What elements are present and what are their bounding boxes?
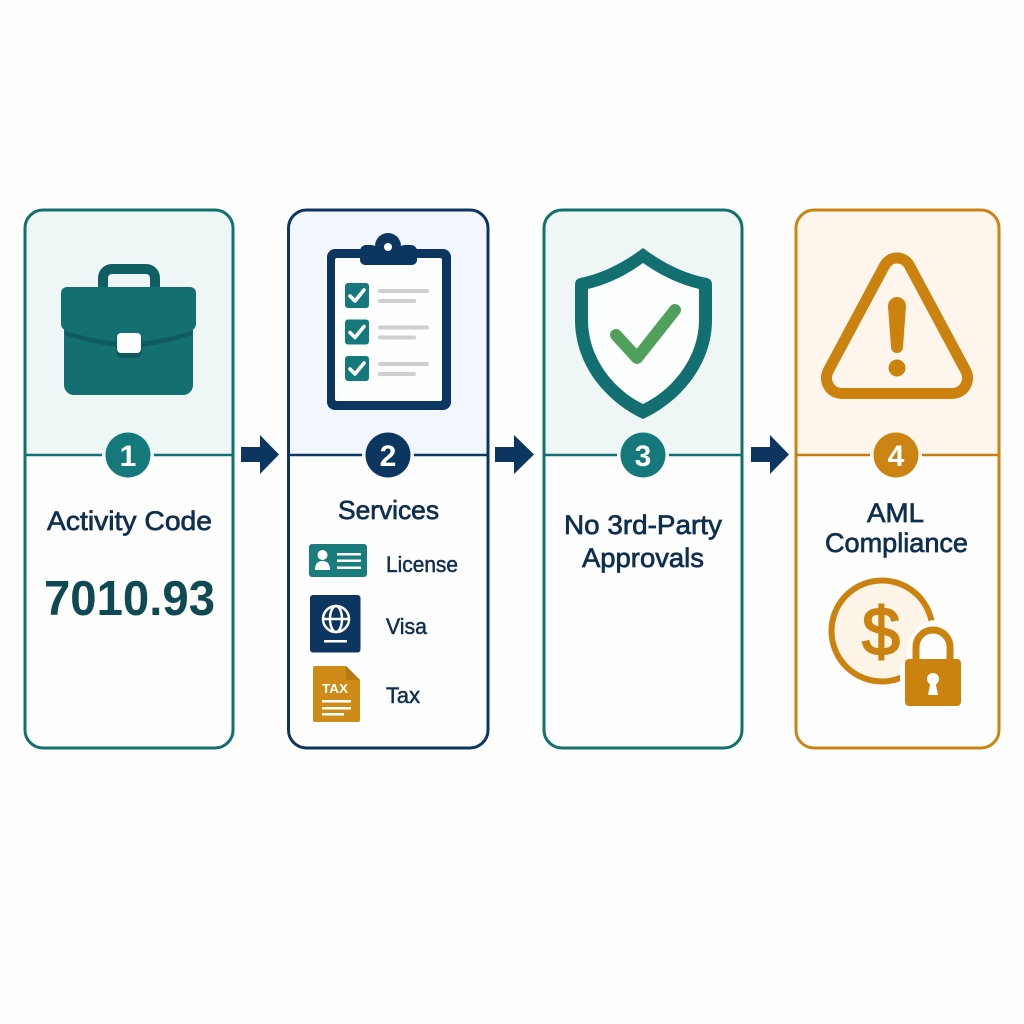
panel: step 3 no third-party approvals — [544, 210, 742, 748]
icon: visa passport — [310, 595, 360, 652]
step number 3: 3 — [635, 440, 651, 473]
panel: step 4 AML compliance — [796, 210, 999, 748]
arrow: step 2 to 3 — [495, 435, 534, 474]
value: 7010.93: 7010.93 — [44, 572, 215, 626]
checklist row 2 — [345, 320, 429, 344]
label: license: License — [386, 552, 458, 577]
icon: shield with check — [575, 248, 712, 419]
step number 4 — [870, 429, 922, 481]
icon: clipboard checklist — [327, 233, 451, 410]
icon: tax document: TAX — [322, 681, 348, 696]
heading: AML compliance — [825, 498, 968, 558]
icon: tax document — [313, 666, 360, 722]
arrow: step 3 to 4 — [751, 435, 789, 474]
step number 2 — [362, 429, 414, 481]
step number 3 — [617, 429, 669, 481]
heading: AML compliance: Compliance — [825, 528, 968, 558]
heading: activity code: Activity Code — [47, 506, 212, 536]
checklist row 1 — [345, 283, 429, 308]
step number 4: 4 — [888, 440, 905, 473]
label: tax: Tax — [386, 683, 420, 708]
heading: AML compliance: AML — [867, 498, 924, 528]
heading: no 3rd-party approvals: No 3rd-Party — [564, 510, 723, 540]
icon: coin and padlock: $ — [862, 594, 900, 670]
panel: step 2 services — [288, 210, 488, 748]
icon: briefcase — [61, 269, 196, 395]
arrow: step 1 to 2 — [241, 435, 279, 474]
heading: no 3rd-party approvals: Approvals — [582, 543, 704, 573]
icon: coin and padlock — [832, 580, 968, 720]
panel: step 1 activity code — [25, 210, 233, 748]
step number 2: 2 — [380, 440, 396, 473]
step number 1 — [102, 429, 154, 481]
checklist row 3 — [345, 356, 429, 381]
icon: license card — [309, 544, 367, 577]
heading: services: Services — [338, 495, 439, 525]
label: visa: Visa — [386, 614, 428, 639]
icon: warning triangle — [826, 258, 968, 394]
heading: no 3rd-party approvals — [564, 510, 723, 573]
step number 1: 1 — [120, 440, 136, 473]
